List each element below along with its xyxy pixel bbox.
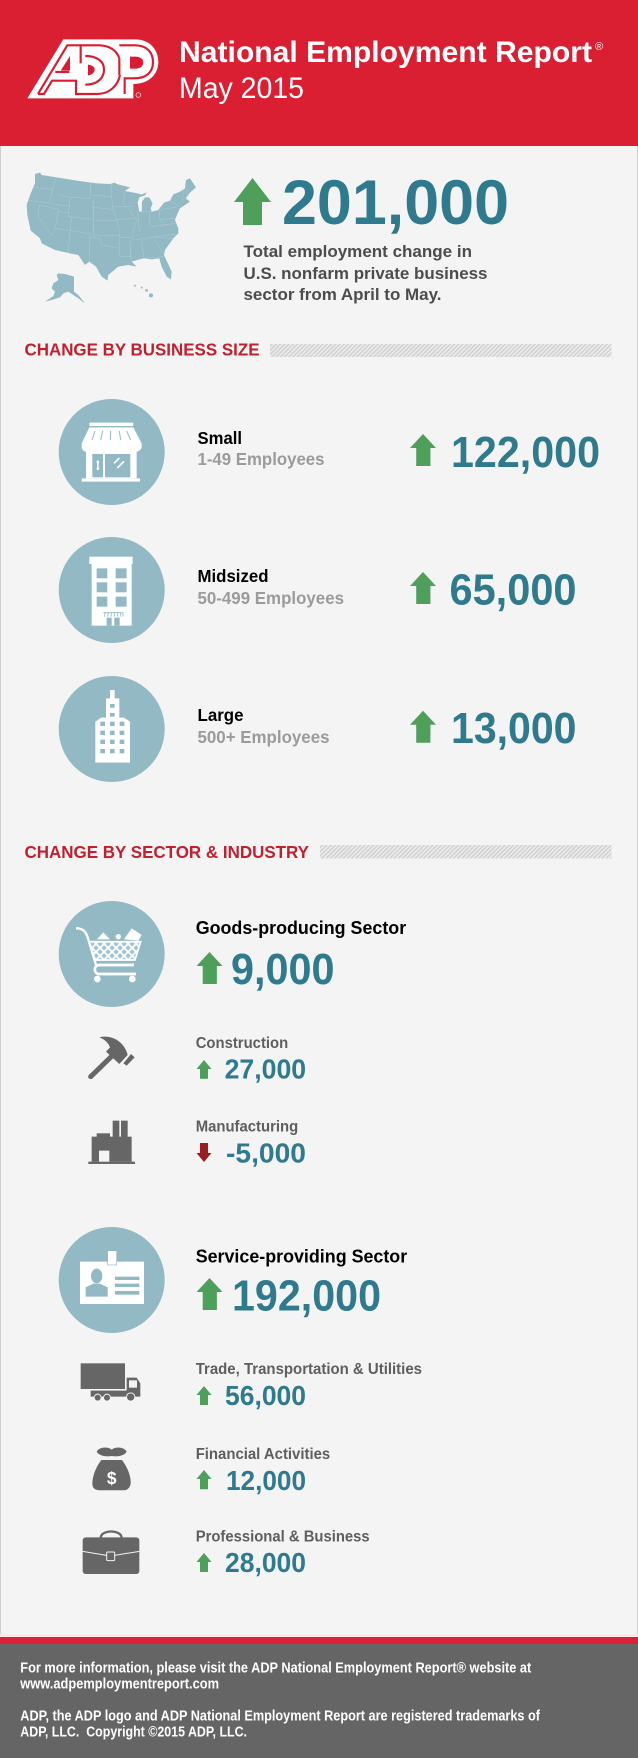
- sublabel: 1-49 employees: 1-49 Employees: [198, 449, 325, 469]
- registered mark: ®: [595, 41, 603, 53]
- arrow up: [410, 572, 436, 604]
- description: U.S. nonfarm private business: [244, 264, 488, 283]
- icon: ADP logo: [27, 39, 158, 98]
- heading: change by business size: CHANGE BY BUSINESS SIZE: [24, 340, 260, 360]
- label: construction: Construction: [196, 1035, 288, 1052]
- label: goods-producing sector: Goods-producing Sector: [196, 918, 406, 938]
- label: large: Large: [198, 705, 244, 725]
- footer text: trademarks: [20, 1709, 540, 1741]
- icon: factory: [88, 1121, 135, 1164]
- label: trade, transportation and utilities: Trade, Transportation & Utilities: [196, 1361, 422, 1378]
- label: midsized: Midsized: [198, 566, 268, 586]
- US map: [27, 173, 196, 303]
- label: financial activities: Financial Activities: [196, 1446, 330, 1463]
- icon: skyscraper: [59, 676, 165, 782]
- row: goods-producing sector: [59, 901, 406, 1007]
- description: [244, 242, 488, 304]
- icon: storefront: [59, 399, 165, 505]
- arrow up: [196, 1386, 212, 1405]
- footer text: more information: www.adpemploymentreport.com: [19, 1677, 219, 1693]
- icon: ID badge: [59, 1227, 165, 1333]
- footer text: trademarks: ADP, LLC. Copyright ©2015 ADP, LLC.: [20, 1725, 247, 1741]
- arrow up: [196, 1470, 212, 1489]
- heading: change by sector and industry: [24, 842, 612, 862]
- row: financial activities: [92, 1446, 330, 1496]
- icon: shopping cart: [59, 901, 165, 1007]
- label: manufacturing: Manufacturing: [196, 1119, 298, 1136]
- number: 12,000: [226, 1465, 306, 1496]
- arrow up: [196, 1278, 222, 1310]
- row: professional and business: [83, 1529, 370, 1578]
- row: construction: [91, 1035, 306, 1085]
- number: 28,000: [225, 1547, 306, 1578]
- description: Total employment change in: [244, 242, 472, 261]
- arrow up: [196, 952, 222, 984]
- number: -5,000: [226, 1138, 306, 1169]
- row: trade, transportation and utilities: [81, 1361, 422, 1411]
- row: large business: [59, 676, 576, 782]
- header banner: [0, 0, 638, 146]
- footer text: trademarks: ADP, the ADP logo and ADP National Employment Report are registered trademarks of: [20, 1709, 540, 1725]
- number: 192,000: [232, 1272, 381, 1321]
- arrow up: total: [234, 178, 271, 225]
- icon: money bag: [92, 1448, 131, 1490]
- title: National Employment Report: [179, 36, 592, 69]
- number: 56,000: [225, 1380, 306, 1411]
- sublabel: 50-499 employees: 50-499 Employees: [198, 588, 344, 608]
- row: midsized business: [59, 537, 576, 643]
- subtitle: date: May 2015: [179, 72, 304, 105]
- icon: truck: [81, 1363, 140, 1402]
- number: 9,000: [231, 945, 334, 994]
- icon: briefcase: [83, 1531, 139, 1574]
- footer: [0, 1634, 638, 1758]
- heading: change by sector and industry: CHANGE BY SECTOR & INDUSTRY: [24, 842, 309, 862]
- label: professional and business: Professional & Business: [196, 1529, 370, 1546]
- panel: total employment change: [27, 168, 509, 304]
- row: service-providing sector: [59, 1227, 407, 1333]
- arrow up: [196, 1060, 212, 1079]
- row: small business: [59, 399, 600, 505]
- icon: money bag: $: [107, 1468, 117, 1488]
- label: small: Small: [198, 428, 242, 448]
- arrow up: [410, 434, 436, 466]
- row: manufacturing: [88, 1119, 306, 1169]
- number: 122,000: [451, 428, 600, 477]
- sublabel: 500+ employees: 500+ Employees: [198, 727, 330, 747]
- description: sector from April to May.: [244, 285, 442, 304]
- footer text: more information: [19, 1661, 531, 1693]
- arrow up: [196, 1553, 212, 1572]
- icon: office building: [59, 537, 165, 643]
- number: total: 201,000: [282, 168, 509, 238]
- label: service-providing sector: Service-providing Sector: [196, 1247, 407, 1267]
- footer text: more information: For more information, please visit the ADP National Employment Report® website at: [20, 1661, 531, 1677]
- number: 27,000: [225, 1054, 306, 1085]
- arrow up: [410, 711, 436, 743]
- number: 13,000: [451, 704, 576, 753]
- number: 65,000: [450, 566, 576, 614]
- icon: hammer: [91, 1037, 135, 1077]
- heading: change by business size: [24, 340, 612, 360]
- arrow down: [196, 1143, 212, 1162]
